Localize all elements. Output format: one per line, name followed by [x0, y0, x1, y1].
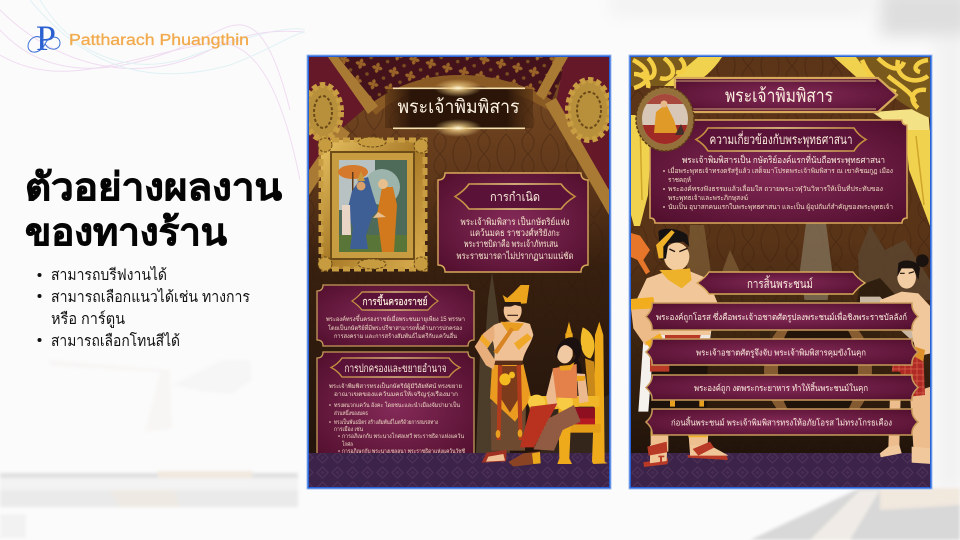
birth heading pill: [455, 184, 575, 209]
floor: [631, 453, 930, 487]
band: deposed by son: [646, 303, 918, 330]
title banner: พระเจ้าพิมพิสาร: [398, 97, 520, 118]
birth text: พระเจ้าพิมพิสาร เป็นกษัตริย์แห่ง: [460, 215, 570, 227]
governance text: การอภิเษกกับ พระนางเชลลนา พระราชธิดาแห่งแคว้นวัชชี: [342, 447, 465, 455]
band: imprisoned: [646, 339, 918, 365]
logo: [28, 18, 249, 58]
logo monogram: P: [36, 18, 56, 58]
bullet list: [38, 266, 250, 350]
accession text: [326, 314, 464, 338]
king skirt: [490, 358, 531, 451]
accession heading pill: การขึ้นครองราชย์: [362, 294, 428, 308]
heading: ของทางร้าน: [25, 212, 227, 254]
title ribbon: [675, 78, 897, 112]
band: deposed by son: พระองค์ถูกโอรส ซึ่งคือพระเจ้าอชาตศัตรูปลงพระชนม์เพื่อชิงพระราชบัลลังก์: [656, 311, 907, 323]
band: imprisoned: พระเจ้าอชาตศัตรูจึงจับ พระเจ้าพิมพิสารคุมขังในคุก: [696, 348, 866, 358]
birth text: พระราชมารดาไม่ปรากฏนามแน่ชัด: [456, 250, 574, 261]
panel: end of life heading: การสิ้นพระชนม์: [747, 275, 813, 291]
panel: accession: [317, 285, 474, 346]
temple silhouettes: [686, 224, 930, 408]
brand name: Pattharach Phuangthin: [69, 32, 249, 49]
governance text: การอภิเษกกับ พระนางโกศลเทวี พระราชธิดาแห่งแคว้น: [342, 432, 464, 440]
yellow curtains: [631, 57, 930, 226]
rosette ornaments: [305, 80, 610, 140]
queen figure: [508, 337, 589, 467]
panel: left poster: [305, 55, 611, 489]
religion bullets: นับเป็น อุบาสกคนแรกในพระพุทธศาสนา และเป็น ผู้อุปถัมภ์สำคัญของพระพุทธเจ้า: [668, 202, 893, 211]
bullet list: สามารถเลือกโทนสีได้: [51, 332, 180, 350]
governance text: ส่วนหนึ่งของมคธ: [334, 409, 368, 417]
religion summary: พระเจ้าพิมพิสารเป็น กษัตริย์องค์แรกที่นับถือพระพุทธศาสนา: [682, 153, 885, 166]
panel: end of life heading: [697, 272, 865, 294]
logo monogram: [28, 18, 60, 58]
bullet list: สามารถเลือกแนวได้เช่น ทางการ: [51, 288, 250, 306]
governance text: โกศล: [342, 440, 353, 448]
governance heading pill: การปกครองและขยายอำนาจ: [344, 363, 446, 375]
painting: king and Buddha: [338, 160, 407, 252]
religion bullets: [663, 166, 893, 211]
band: starved: [646, 375, 918, 400]
floor: [309, 453, 609, 487]
king torso and arms: [475, 321, 533, 369]
governance text: ทรงเป็นพันธมิตร สร้างสัมพันธ์ไมตรีด้วยการสมรสทาง: [334, 417, 438, 426]
heading: ตัวอย่างผลงาน: [25, 167, 282, 209]
torso: [630, 270, 717, 347]
band: starved: พระองค์ถูก งดพระกระยาหาร ทำให้สิ้นพระชนม์ในคุก: [694, 381, 868, 394]
illustration: king standing: [475, 285, 533, 463]
gold corner ornaments: [631, 57, 930, 118]
illustration: prince with sword: [860, 254, 931, 464]
panel: birth: [438, 173, 588, 272]
religion bullets: พระพุทธเจ้าและพระภิกษุสงฆ์: [668, 194, 748, 202]
governance heading pill: [331, 358, 460, 377]
birth text: [456, 215, 574, 261]
king sandal: [482, 450, 507, 463]
religion bullets: ราชคฤห์: [668, 176, 691, 184]
panel: religion: [650, 120, 907, 223]
accession text: การสงคราม และการสร้างสัมพันธ์ไมตรีกับแคว้นอื่น: [334, 332, 457, 340]
religion bullets: เมื่อพระพุทธเจ้าทรงตรัสรู้แล้ว เสด็จมาโปรดพระเจ้าพิมพิสาร ณ เขาคิชฌกูฏ เมือง: [668, 166, 893, 175]
religion heading pill: [696, 128, 866, 151]
religion bullets: พระองค์ทรงฟังธรรมแล้วเลื่อมใส ถวายพระเวฬุวันวิหารให้เป็นที่ประทับของ: [668, 184, 883, 193]
panel: right poster: [627, 55, 932, 489]
religion heading pill: ความเกี่ยวข้องกับพระพุทธศาสนา: [710, 131, 852, 148]
governance text: ทรงผนวกแคว้น อังคะ โดยชนะและนำเมืองจัมปามาเป็น: [334, 400, 460, 409]
poster background: [309, 57, 609, 457]
illustration: prince with mace: [627, 229, 729, 467]
poster background: [631, 57, 930, 457]
accession text: โดยเป็นกษัตริย์ที่มีพระปรีชาสามารถทั้งด้านการปกครอง: [328, 322, 462, 332]
temple silhouettes: [476, 272, 609, 453]
heading: [25, 167, 282, 254]
head: [656, 229, 692, 288]
bullet list: หรือ การ์ตูน: [51, 310, 125, 329]
accession heading pill: [352, 292, 438, 310]
skirt: [638, 328, 712, 412]
governance text: พระเจ้าพิมพิสารทรงเป็นกษัตริย์ผู้มีวิสัยทัศน์ ทรงขยาย: [329, 381, 462, 390]
gold picture frame: [318, 137, 428, 271]
title banner: [385, 79, 533, 137]
accession text: พระองค์ทรงขึ้นครองราชย์เมื่อพระชนมายุเพียง 15 พรรษา: [326, 313, 465, 323]
governance text: [329, 381, 465, 455]
mace: [627, 232, 650, 274]
king head: [503, 285, 529, 322]
ceiling and arch decoration: [309, 57, 609, 215]
throne: [528, 322, 607, 464]
round medallion: [636, 87, 694, 151]
title ribbon: พระเจ้าพิมพิสาร: [725, 86, 833, 107]
illustration: queen on throne: [508, 322, 607, 467]
birth text: พระราชบิดาคือ พระเจ้าภัทรเสน: [464, 239, 558, 249]
legs and sandals: [643, 428, 729, 467]
band: forgiveness: [646, 409, 918, 435]
governance text: การเมือง เช่น: [334, 425, 363, 433]
decorative wave lines: [0, 0, 305, 180]
bullet list: สามารถบรีฟงานได้: [51, 266, 167, 284]
governance text: อาณาเขตของแคว้นมคธให้เจริญรุ่งเรืองมาก: [334, 390, 459, 398]
birth heading pill: การกำเนิด: [490, 190, 540, 204]
band: forgiveness: ก่อนสิ้นพระชนม์ พระเจ้าพิมพิสารทรงให้อภัยโอรส ไม่ทรงโกรธเคือง: [671, 416, 892, 428]
birth text: แคว้นมคธ ราชวงศ์หริยังกะ: [470, 227, 560, 238]
panel: governance: [317, 352, 474, 462]
